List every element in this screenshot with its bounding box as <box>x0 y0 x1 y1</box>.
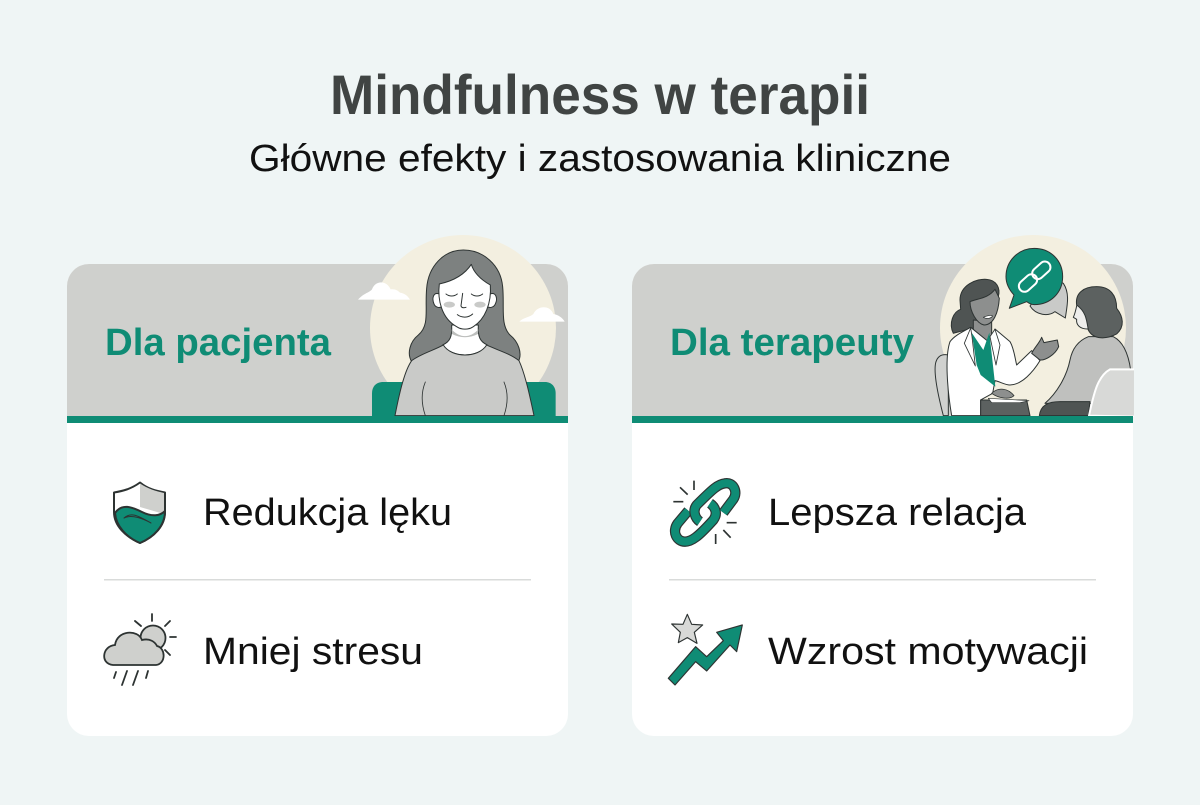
title: Mindfulness w terapii <box>330 63 870 126</box>
facial features <box>446 293 483 317</box>
item: Wzrost motywacji <box>668 614 1088 685</box>
icon: star and rising arrow <box>668 614 742 685</box>
icon: cloud with sun <box>104 614 176 685</box>
patient legs <box>1039 402 1090 416</box>
green speech bubble <box>1006 248 1063 308</box>
link icon in bubble <box>1018 260 1052 293</box>
gray speech bubble <box>1030 283 1068 318</box>
clipboard <box>988 398 1029 403</box>
lab coat <box>947 327 1040 416</box>
cloud left <box>358 282 410 300</box>
patient chair <box>1089 369 1135 417</box>
illustration: therapist and patient <box>935 248 1135 417</box>
label: Mniej stresu <box>203 631 423 673</box>
panel: Dla pacjenta <box>67 235 568 736</box>
cloud right <box>519 307 565 322</box>
heading: Dla terapeuty <box>670 322 914 364</box>
icon: shield <box>114 482 165 543</box>
therapist chair <box>935 355 948 416</box>
face <box>439 264 490 329</box>
hair <box>409 250 520 362</box>
sun circle <box>940 235 1126 421</box>
subtitle: Główne efekty i zastosowania kliniczne <box>249 138 951 180</box>
panel header <box>632 264 1133 417</box>
therapist hand on clipboard <box>992 389 1014 398</box>
trousers <box>981 400 1030 416</box>
icon: chain link <box>673 481 737 544</box>
panel header <box>67 264 568 417</box>
illustration: meditating woman <box>358 250 565 417</box>
accent bar <box>67 416 568 423</box>
heading: Dla pacjenta <box>105 322 332 364</box>
neck and chest <box>443 325 487 355</box>
hand <box>1032 337 1059 360</box>
sweater <box>395 345 534 416</box>
therapist hair <box>951 279 999 333</box>
item: Lepsza relacja <box>673 481 1027 544</box>
patient body <box>1045 337 1131 403</box>
label: Wzrost motywacji <box>768 631 1088 673</box>
green scrubs <box>972 333 995 387</box>
label: Redukcja lęku <box>203 492 452 534</box>
smile <box>983 315 993 318</box>
label: Lepsza relacja <box>768 492 1027 534</box>
item: Mniej stresu <box>104 614 423 685</box>
patient hair <box>1076 287 1122 338</box>
lapels <box>964 328 1000 366</box>
item: Redukcja lęku <box>114 482 452 543</box>
sun circle <box>370 235 556 382</box>
patient face <box>1072 305 1088 330</box>
chair <box>372 382 556 417</box>
accent bar <box>632 416 1133 423</box>
therapist face <box>970 289 999 325</box>
panel: Dla terapeuty <box>632 235 1135 736</box>
ears <box>433 294 442 307</box>
therapist neck <box>972 320 992 340</box>
